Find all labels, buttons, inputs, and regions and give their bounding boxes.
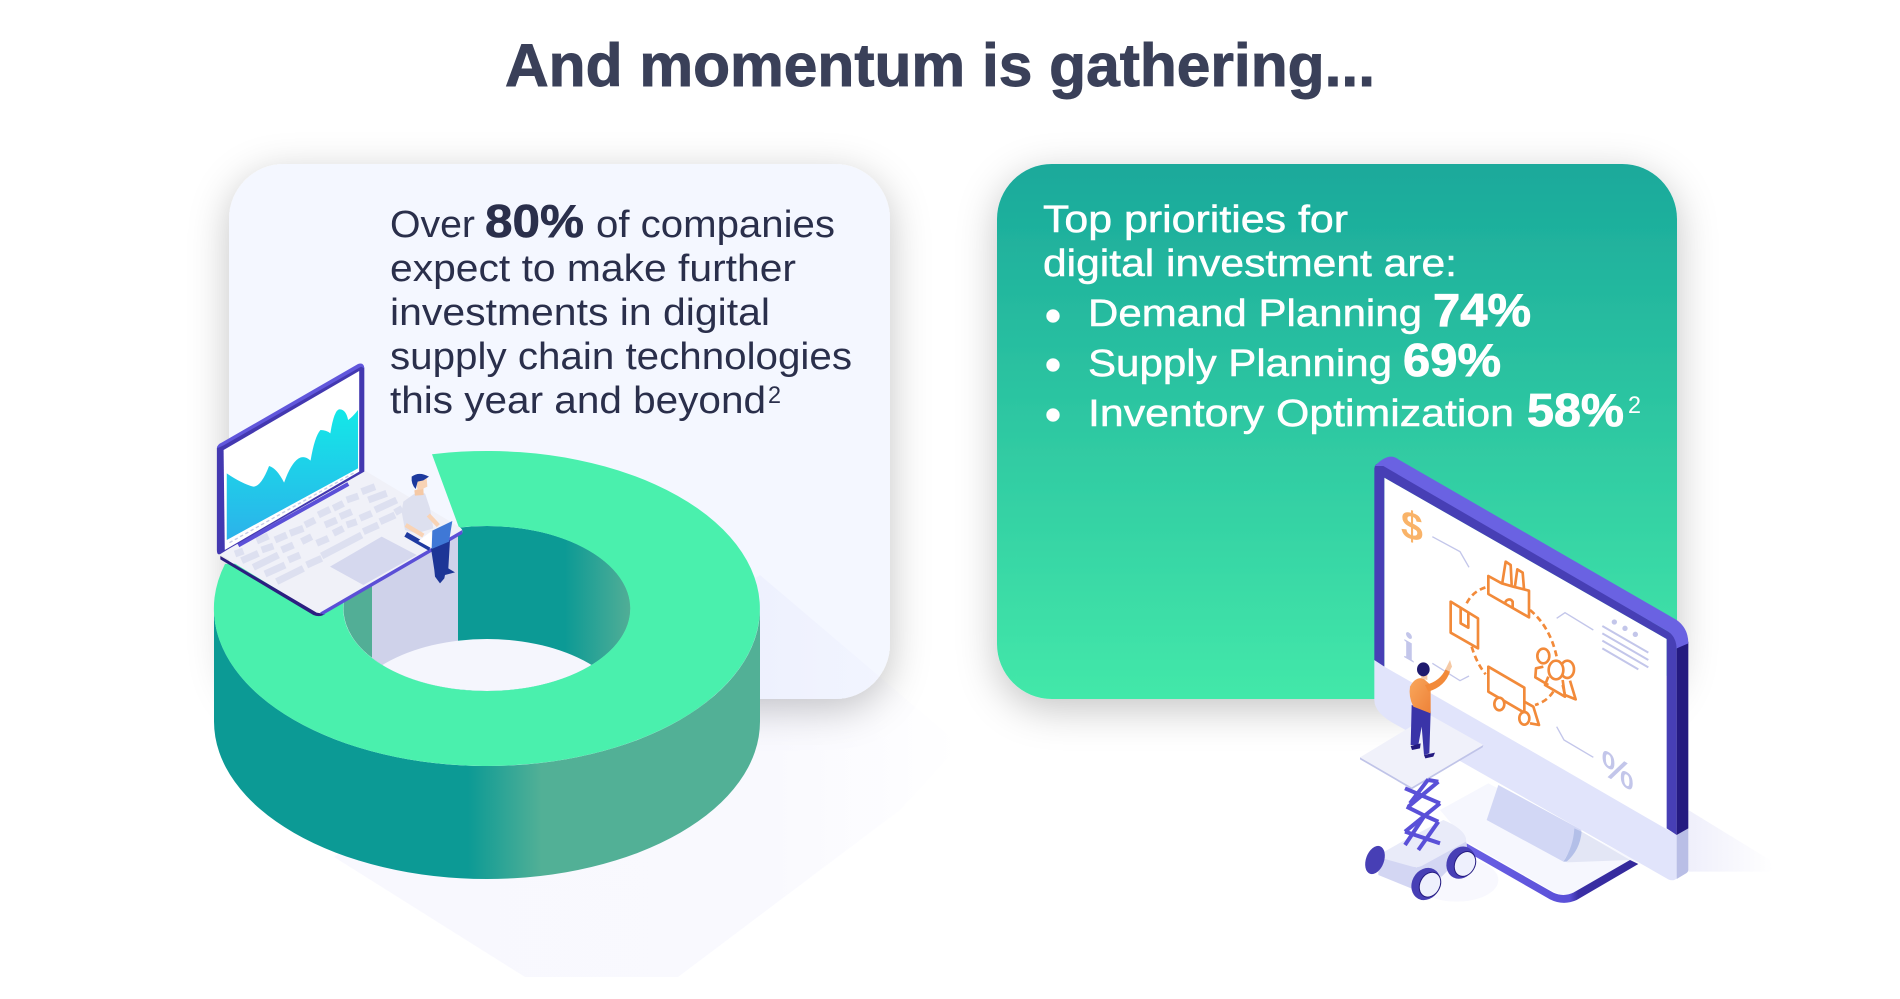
text block: over 80% of companies: expect to make further: [390, 248, 796, 290]
text block: top priorities list: [1043, 199, 1641, 436]
text block: top priorities list: Inventory Optimization: [1088, 393, 1514, 435]
scissor lift arms: [1405, 779, 1440, 850]
icon: laptop with chart: [217, 364, 463, 616]
person in orange: [1410, 660, 1452, 758]
monitor base: [1440, 783, 1638, 903]
panel: light card: [229, 164, 890, 699]
monitor neck: [1487, 785, 1630, 862]
cart body: [1378, 820, 1467, 893]
text block: over 80% of companies: Over: [390, 204, 475, 246]
laptop keyboard deck: [220, 467, 463, 616]
text block: top priorities list: 74%: [1433, 284, 1531, 336]
icon: percent sign: %: [1602, 742, 1634, 800]
text block: top priorities list: 69%: [1403, 334, 1501, 386]
donut chart: 80 percent ring: [214, 451, 760, 879]
icon: info sign: i: [1403, 622, 1414, 672]
cart wheels: [1362, 841, 1481, 905]
cart shadow: [1415, 858, 1498, 902]
text block: over 80% of companies: supply chain technologies: [390, 336, 852, 378]
scissor lift cart and arms: [1362, 779, 1481, 905]
text block: top priorities list: Top priorities for: [1043, 199, 1348, 241]
text block: over 80% of companies: [390, 195, 852, 422]
text block: over 80% of companies: this year and beyond: [390, 380, 766, 422]
scissor lift platform: [1360, 715, 1483, 789]
text block: over 80% of companies: 2: [768, 382, 781, 409]
text block: top priorities list: Demand Planning: [1088, 293, 1422, 335]
text block: over 80% of companies: of companies: [596, 204, 835, 246]
text block: top priorities list: Supply Planning: [1088, 343, 1392, 385]
icon: man sitting with laptop: [402, 474, 455, 583]
icon: dollar sign: $: [1401, 502, 1423, 551]
text block: over 80% of companies: investments in digital: [390, 292, 770, 334]
donut cast shadow: [334, 575, 960, 977]
monitor body: [1374, 457, 1688, 880]
text block: top priorities list: digital investment are:: [1043, 243, 1457, 285]
title: And momentum is gathering...: [505, 32, 1375, 99]
icon: monitor with supply chain: [1360, 457, 1773, 905]
panel: green card: [997, 164, 1677, 699]
text block: top priorities list: 58%: [1527, 384, 1624, 436]
text block: over 80% of companies: 80%: [485, 195, 584, 247]
supply chain loop: [1451, 562, 1576, 725]
monitor shadow: [1688, 810, 1773, 872]
screen decorations: [1432, 537, 1648, 757]
laptop screen: [217, 364, 364, 554]
text block: top priorities list: 2: [1628, 392, 1641, 419]
